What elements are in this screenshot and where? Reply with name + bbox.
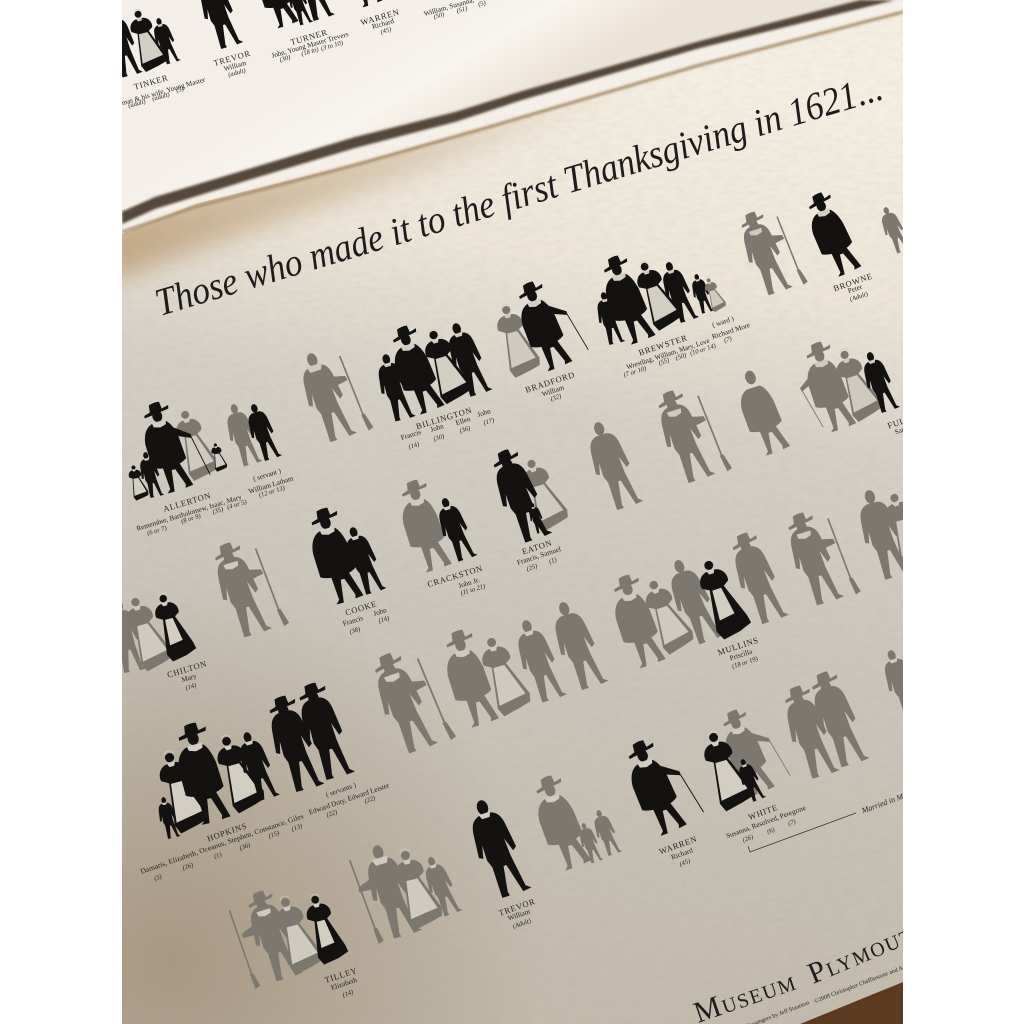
- Warren figure: [619, 729, 706, 839]
- family: Allerton: [127, 394, 295, 537]
- Browne caption: BROWNE: [832, 271, 874, 293]
- copyright: ©2008 Christopher Chaffinstone and Associates: [813, 957, 924, 1005]
- wood table corner: [800, 982, 903, 1024]
- row two unnamed figures: [581, 366, 791, 513]
- top sheet captions: (5): [175, 86, 185, 94]
- gray family with musket: [348, 840, 463, 945]
- Billington figures: [378, 323, 492, 422]
- Crackston caption: CRACKSTON: [426, 563, 484, 589]
- top sheet captions: TREVOR: [212, 48, 252, 68]
- Crackston caption: [428, 566, 485, 596]
- Cooke caption: John: [372, 606, 388, 618]
- Mullins caption: MULLINS: [716, 635, 760, 657]
- top sheet captions: John, Young Master Trevers: [271, 30, 350, 60]
- Allerton caption: (12 or 13): [258, 485, 286, 499]
- Trevor figure: [462, 794, 532, 901]
- top sheet captions: Richard: [371, 17, 395, 31]
- Billington caption: (36): [459, 425, 471, 435]
- family: Browne: [809, 192, 872, 302]
- Hopkins caption: (22): [326, 809, 338, 819]
- Hopkins figures: [154, 678, 355, 840]
- figure: musketeer with hat: [742, 212, 808, 296]
- family: Trevor: [462, 794, 537, 930]
- Hopkins caption: (1): [213, 851, 223, 861]
- Allerton caption: William Latham: [248, 474, 295, 496]
- Billington caption: [400, 405, 495, 451]
- marriage bracket: [748, 783, 928, 852]
- White caption: (7): [787, 818, 797, 828]
- top sheet captions: (adult): [151, 91, 171, 103]
- top sheet captions: TURNER: [289, 27, 329, 47]
- family: Eaton: [494, 449, 568, 572]
- top sheet captions: (3 to 10): [320, 40, 344, 52]
- figure: musketeer with hat: [215, 542, 289, 638]
- Chilton caption: CHILTON: [166, 658, 208, 680]
- Crackston caption: John Jr.: [457, 576, 481, 590]
- Hopkins caption: Edward Doty, Edward Leister: [308, 781, 391, 817]
- Bradford figures: [497, 281, 589, 378]
- Browne caption: (Adult): [849, 291, 869, 303]
- top sheet captions: William: [223, 59, 248, 73]
- top sheet captions: (adult): [227, 67, 247, 79]
- family: Hopkins: [139, 678, 391, 883]
- Brewster figures: [598, 256, 726, 345]
- Warren caption: Richard: [670, 846, 694, 862]
- Plymouth name: PLYMOUTH: [803, 910, 933, 990]
- Trevor caption: William: [507, 907, 532, 923]
- top sheet captions: TINKER: [133, 72, 169, 92]
- Brewster caption: (7): [723, 335, 733, 345]
- family: Bradford: [497, 281, 589, 402]
- White figures: [698, 700, 793, 813]
- Chilton caption: [168, 660, 206, 691]
- top sheet captions: (30): [279, 54, 291, 64]
- top sheet captions: Thomas & his wife, Young Master: [110, 75, 207, 110]
- Trevor caption: TREVOR: [497, 896, 537, 918]
- figure: musketeer: [303, 353, 374, 442]
- row three gray figures: [367, 596, 609, 758]
- Hopkins caption: (36): [239, 842, 251, 852]
- Eaton caption: (25): [526, 563, 538, 573]
- gray man with two boys: [527, 771, 622, 873]
- Eaton caption: EATON: [521, 537, 553, 557]
- Tilley caption: [323, 965, 359, 999]
- Allerton caption: ALLERTON: [162, 490, 212, 514]
- Tilley caption: Elizabeth: [330, 976, 358, 992]
- Allerton caption: (8 or 9): [180, 513, 202, 525]
- poster paper: [100, 0, 904, 1024]
- Allerton caption: ( servant ): [252, 467, 283, 483]
- Brewster caption: Richard More: [711, 321, 751, 341]
- Cooke caption: COOKE: [344, 598, 378, 618]
- museum credit: [690, 910, 933, 1024]
- Brewster caption: [623, 315, 751, 379]
- row three right figures: [725, 485, 934, 721]
- Warren caption: (45): [679, 858, 691, 868]
- Chilton figures: [122, 593, 196, 673]
- Eaton caption: Francis, Samuel: [516, 545, 562, 567]
- Crackston figures: [402, 480, 478, 572]
- Hopkins caption: (13): [291, 823, 303, 833]
- Cooke figures: [312, 508, 386, 604]
- Brewster caption: Wrestling, William, Mary, Love: [625, 337, 711, 371]
- Allerton figures: [127, 394, 282, 501]
- Billington caption: (17): [483, 417, 495, 427]
- White caption: WHITE: [747, 802, 779, 822]
- Cooke caption: Francis: [342, 614, 364, 628]
- paper crease: [122, 0, 903, 234]
- Brewster caption: (10 or 14): [689, 343, 717, 357]
- Billington caption: John: [429, 422, 445, 434]
- Hopkins caption: (26): [182, 862, 194, 872]
- Allerton caption: [135, 467, 295, 537]
- White caption: (26): [742, 834, 754, 844]
- family: Chilton: [122, 593, 206, 691]
- family: Fuller: [800, 342, 903, 434]
- Hopkins caption: (3): [153, 873, 163, 883]
- family: Crackston: [402, 480, 485, 596]
- Chilton caption: (14): [185, 682, 197, 692]
- Eaton figures: [494, 449, 568, 543]
- Trevor caption: [497, 896, 537, 930]
- top sheet captions: (51): [456, 5, 468, 15]
- Mullins caption: Priscilla: [729, 647, 754, 662]
- Hopkins caption: ( servants ): [325, 781, 358, 799]
- Eaton caption: [516, 540, 562, 572]
- Mullins caption: (18 or 19): [731, 656, 759, 670]
- top sheet captions: (45): [380, 26, 392, 36]
- Brewster caption: (55): [658, 357, 670, 367]
- Cooke caption: (38): [349, 626, 361, 636]
- Bradford caption: BRADFORD: [524, 369, 576, 395]
- Bradford caption: (32): [550, 393, 562, 403]
- Allerton caption: Remember, Bartholomew, Isaac, Mary: [135, 493, 243, 533]
- Chilton caption: Mary: [180, 672, 198, 684]
- Allerton caption: (4 or 5): [226, 499, 248, 511]
- Tilley caption: (14): [342, 989, 354, 999]
- Crackston caption: (11 to 21): [460, 583, 486, 597]
- Tilley figures: [227, 886, 350, 989]
- White caption: Susanna, Resolved, Peregrine: [725, 804, 807, 840]
- Cooke caption: [342, 601, 389, 635]
- Mullins figures: [605, 552, 754, 671]
- Cooke caption: (14): [378, 615, 390, 625]
- family: Billington: [373, 319, 495, 451]
- Allerton caption: (35): [212, 506, 224, 516]
- Warren caption: [657, 833, 699, 868]
- family: White: [698, 700, 928, 852]
- Bradford caption: [524, 372, 574, 402]
- Eaton caption: (1): [548, 556, 558, 566]
- Hopkins caption: [139, 781, 391, 883]
- Mullins caption: [716, 635, 760, 670]
- Brewster caption: BREWSTER: [637, 332, 689, 358]
- Allerton caption: (6 or 7): [146, 525, 168, 537]
- family: Brewster: [593, 252, 751, 379]
- top sheet captions: WARREN: [359, 7, 401, 27]
- Tilley caption: TILLEY: [323, 965, 359, 985]
- Billington caption: Francis: [400, 428, 422, 442]
- Fuller caption: Samuel: [894, 422, 916, 436]
- marriage bracket: Married in May 1621: [860, 783, 928, 816]
- family: Tilley: [227, 886, 359, 999]
- Warren caption: WARREN: [657, 833, 699, 857]
- family: Warren: [619, 729, 706, 868]
- Hopkins caption: HOPKINS: [206, 820, 248, 844]
- Billington caption: (14): [408, 441, 420, 451]
- White caption: (6): [766, 826, 776, 836]
- Browne figure: [809, 192, 862, 277]
- gray hatted men: [778, 667, 870, 781]
- Fuller caption: FULLER: [886, 409, 924, 431]
- Browne caption: Peter: [847, 283, 864, 295]
- Billington caption: Ellen: [455, 415, 472, 427]
- Brewster caption: ( ward ): [711, 315, 736, 329]
- family: Cooke: [312, 508, 389, 635]
- Bradford caption: William: [541, 384, 566, 398]
- Hopkins caption: (15): [268, 830, 280, 840]
- top sheet captions: (adult): [127, 98, 147, 110]
- top sheet captions: [110, 0, 487, 110]
- Brewster caption: (50): [675, 352, 687, 362]
- top sheet captions: (18 to): [300, 46, 320, 58]
- Billington caption: John: [476, 407, 492, 419]
- Hopkins caption: Damaris, Elizabeth, Oceanus, Stephen, Constance, Giles: [139, 812, 305, 876]
- Billington caption: (30): [433, 433, 445, 443]
- top sheet captions: (50): [433, 11, 445, 21]
- title: Those who made it to the first Thanksgiving in 1621...: [150, 66, 888, 325]
- Browne caption: [833, 273, 872, 302]
- Fuller figures: [800, 342, 900, 432]
- Trevor caption: (Adult): [512, 918, 532, 930]
- Brewster caption: (7 or 10): [623, 365, 647, 379]
- Hopkins caption: (22): [364, 795, 376, 805]
- Billington caption: BILLINGTON: [415, 405, 473, 431]
- family: Mullins: [605, 552, 760, 671]
- figure: edge man: [882, 207, 903, 254]
- top sheet figures: [100, 0, 487, 110]
